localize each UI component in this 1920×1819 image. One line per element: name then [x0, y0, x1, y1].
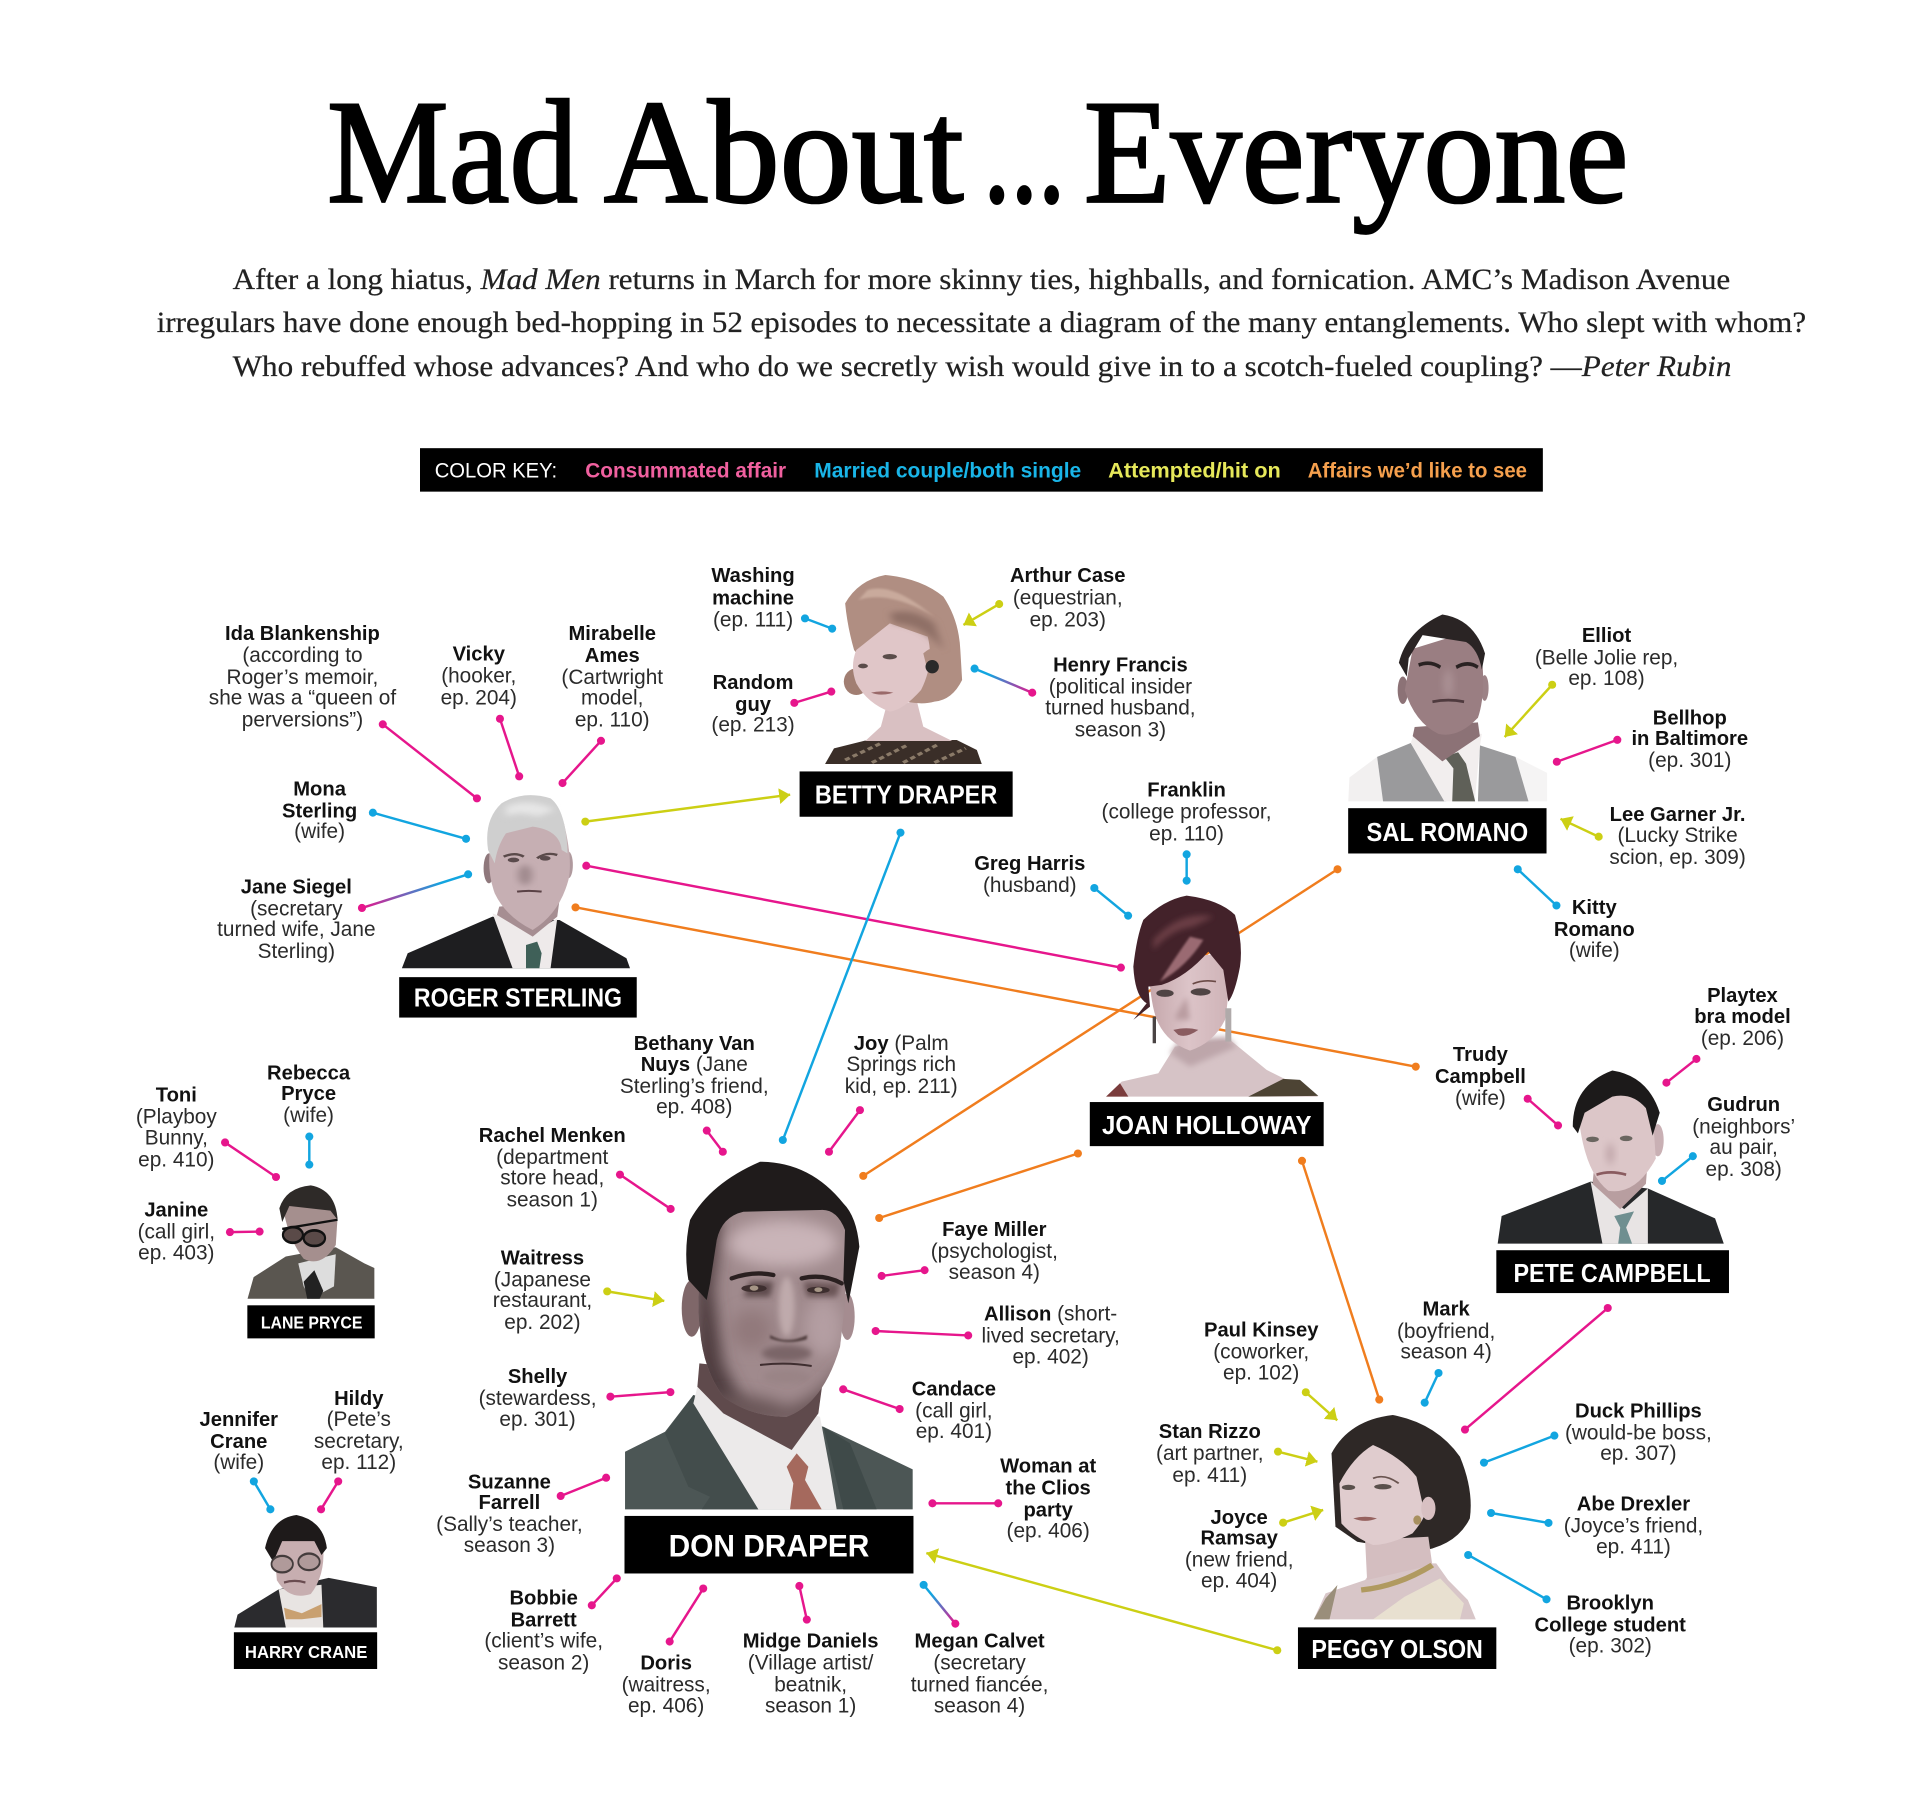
label: Rebecca Pryce: Rebecca	[267, 1062, 351, 1084]
color key legend: Married couple/both single	[814, 459, 1081, 483]
label: Doris: Doris	[640, 1653, 692, 1675]
name tag: Don Draper: DON DRAPER	[669, 1527, 869, 1563]
intro text: irregulars have done enough bed-hopping in 52 episodes to necessitate a diagram of the many entanglements. Who slept with whom?	[157, 306, 1806, 339]
connector: Shelly	[606, 1388, 674, 1401]
label: Jennifer Crane: Crane	[210, 1431, 267, 1453]
connector: Midge	[795, 1582, 811, 1624]
label: Janine: Janine	[144, 1200, 208, 1222]
color key legend: Consummated affair	[585, 459, 786, 483]
connector: Don to Sal	[859, 865, 1342, 1180]
label: Candace: ep. 401)	[916, 1420, 992, 1443]
label: Bobbie Barrett: Bobbie	[509, 1588, 578, 1610]
label: Elliot: Elliot	[1582, 625, 1631, 647]
label: Toni: Toni	[156, 1084, 197, 1106]
label: Stan Rizzo: (art partner,	[1156, 1442, 1264, 1465]
label: Janine: ep. 403)	[138, 1241, 214, 1264]
connector: Stan Rizzo	[1274, 1448, 1317, 1462]
label: Faye Miller: Faye Miller	[942, 1219, 1047, 1241]
connector: Paul Kinsey	[1302, 1388, 1337, 1420]
label: Janine: (call girl,	[138, 1221, 215, 1244]
label: Bobbie Barrett: (client’s wife,	[484, 1630, 603, 1653]
connector: Washing machine	[801, 614, 836, 633]
label: Woman at the Clios party: Woman at	[1000, 1455, 1096, 1477]
label: Hildy: ep. 112)	[321, 1451, 396, 1474]
label: Arthur Case: Arthur Case	[1010, 565, 1126, 587]
label: Jane Siegel: Jane Siegel	[241, 876, 352, 898]
label: Duck Phillips: (would-be boss,	[1565, 1421, 1712, 1444]
label: Paul Kinsey: (coworker,	[1213, 1341, 1309, 1364]
connector: Pete to Peggy	[1461, 1304, 1612, 1434]
label: Ida Blankenship: she was a “queen of	[209, 687, 396, 710]
label: Random guy: Random	[713, 672, 793, 694]
label: Waitress: restaurant,	[493, 1289, 592, 1312]
connector: Mark	[1421, 1369, 1443, 1407]
label: Lee Garner Jr.: (Lucky Strike	[1617, 824, 1738, 847]
connector: Megan	[920, 1581, 959, 1628]
connector: Greg Harris	[1090, 884, 1132, 920]
name tag: Roger Sterling: ROGER STERLING	[414, 983, 622, 1013]
label: Megan Calvet: turned fiancée,	[911, 1674, 1048, 1697]
label: Joyce Ramsay: ep. 404)	[1201, 1570, 1277, 1593]
label: Duck Phillips: Duck Phillips	[1575, 1400, 1702, 1422]
connector: Clios woman	[928, 1499, 1002, 1507]
label: Greg Harris: (husband)	[983, 874, 1077, 897]
label: Rebecca Pryce: (wife)	[283, 1104, 334, 1127]
connector: Joan to Don	[875, 1149, 1082, 1222]
label: Rachel Menken: store head,	[500, 1167, 604, 1190]
label: Mirabelle Ames: (Cartwright	[561, 666, 663, 689]
name tag: Joan Holloway: JOAN HOLLOWAY	[1102, 1110, 1312, 1140]
label: Paul Kinsey: Paul Kinsey	[1204, 1320, 1319, 1342]
connector: Suzanne	[557, 1474, 610, 1500]
label: Jane Siegel: turned wife, Jane	[217, 918, 376, 941]
label: Joyce Ramsay: Ramsay	[1200, 1528, 1279, 1550]
label: Stan Rizzo: Stan Rizzo	[1159, 1421, 1261, 1443]
label: Midge Daniels: season 1)	[765, 1694, 856, 1717]
label: Suzanne Farrell: (Sally’s teacher,	[436, 1513, 583, 1536]
label: Jane Siegel: (secretary	[250, 897, 343, 920]
connector: Jennifer	[250, 1477, 274, 1513]
label: Rachel Menken: season 1)	[507, 1189, 598, 1212]
label: Mona Sterling: (wife)	[294, 820, 345, 843]
intro text	[157, 263, 1806, 383]
label: Megan Calvet: Megan Calvet	[915, 1631, 1045, 1653]
connector: Betty to Don	[779, 829, 905, 1144]
label: Ida Blankenship: perversions”)	[242, 709, 363, 732]
label: Elliot: ep. 108)	[1568, 667, 1645, 690]
label: Toni: ep. 410)	[138, 1148, 214, 1171]
connector: Henry Francis	[971, 665, 1036, 697]
connector: Doris	[666, 1584, 707, 1646]
title: ...	[983, 71, 1065, 235]
label: Random guy: guy	[735, 694, 772, 716]
label: Bellhop: (ep. 301)	[1648, 749, 1731, 772]
connector: Jane	[358, 870, 472, 912]
name tag: Don Draper	[624, 1516, 913, 1573]
label: Doris: (waitress,	[622, 1674, 711, 1697]
label: Mark: (boyfriend,	[1397, 1320, 1495, 1343]
connector: Joy	[825, 1106, 864, 1156]
label: Candace: Candace	[912, 1378, 996, 1400]
portrait: Peggy Olson	[1314, 1415, 1476, 1619]
label: Shelly: (stewardess,	[479, 1387, 596, 1410]
label: Random guy: (ep. 213)	[711, 714, 795, 737]
label: Joyce Ramsay: Joyce	[1211, 1507, 1268, 1529]
connector: Hildy	[317, 1477, 342, 1513]
connector: Lee Garner Jr.	[1560, 819, 1603, 841]
label: Ida Blankenship: Ida Blankenship	[225, 623, 380, 645]
connector: Mona	[369, 809, 470, 843]
connector: Vicky	[496, 715, 523, 780]
label: Joy: Joy (Palm	[854, 1032, 949, 1055]
label: Vicky: Vicky	[453, 644, 506, 666]
connector: Waitress	[603, 1287, 664, 1301]
label: Henry Francis: season 3)	[1075, 719, 1166, 742]
label: Mirabelle Ames: Ames	[585, 645, 640, 667]
label: Midge Daniels: Midge Daniels	[743, 1631, 878, 1653]
name tag: Harry Crane	[234, 1632, 377, 1669]
connector: Candace	[839, 1385, 904, 1413]
label: Bobbie Barrett: season 2)	[498, 1652, 589, 1675]
label: Greg Harris: Greg Harris	[974, 853, 1085, 875]
label: Allison: ep. 402)	[1012, 1345, 1089, 1368]
connector: Joan to Peggy	[1298, 1157, 1383, 1404]
label: Playtex bra model: bra model	[1694, 1006, 1791, 1028]
connector: Franklin	[1183, 850, 1191, 885]
label: Candace: (call girl,	[915, 1399, 993, 1422]
label: Paul Kinsey: ep. 102)	[1223, 1361, 1299, 1384]
label: Kitty Romano: Romano	[1554, 919, 1635, 941]
portrait: Betty Draper	[825, 575, 982, 764]
label: Joyce Ramsay: (new friend,	[1185, 1549, 1294, 1572]
label: Hildy: (Pete’s	[327, 1408, 391, 1431]
name tag: Pete Campbell: PETE CAMPBELL	[1513, 1258, 1711, 1288]
portrait: Pete Campbell	[1498, 1070, 1724, 1244]
label: Playtex bra model: Playtex	[1707, 985, 1779, 1007]
label: Lee Garner Jr.: Lee Garner Jr.	[1610, 804, 1745, 826]
label: Washing machine: (ep. 111)	[713, 608, 793, 631]
label: Rebecca Pryce: Pryce	[281, 1083, 336, 1105]
color key legend: COLOR KEY:	[435, 459, 557, 483]
name tag: Betty Draper: BETTY DRAPER	[815, 779, 997, 809]
name tag: Peggy Olson	[1298, 1627, 1496, 1669]
label: Bethany Van Nuys: Sterling’s friend,	[620, 1075, 769, 1098]
label: Jennifer Crane: (wife)	[213, 1451, 264, 1474]
label: Washing machine: machine	[712, 587, 794, 609]
label: Joy: Springs rich	[846, 1053, 956, 1076]
label: Arthur Case: (equestrian,	[1013, 586, 1123, 609]
name tag: Lane Pryce	[247, 1305, 375, 1338]
label: Waitress: ep. 202)	[504, 1311, 581, 1334]
label: Woman at the Clios party: the Clios	[1006, 1478, 1091, 1500]
label: Rachel Menken: Rachel Menken	[479, 1125, 626, 1147]
portrait: Sal Romano	[1348, 614, 1547, 801]
label: Woman at the Clios party: (ep. 406)	[1007, 1519, 1090, 1542]
label: Shelly: Shelly	[508, 1366, 568, 1388]
label: Allison: Allison (short-	[984, 1303, 1117, 1326]
label: Playtex bra model: (ep. 206)	[1701, 1027, 1784, 1050]
portrait: Lane Pryce	[248, 1185, 374, 1299]
connector: Bobbie	[588, 1574, 621, 1609]
name tag: Betty Draper	[800, 771, 1013, 817]
name tag: Peggy Olson: PEGGY OLSON	[1311, 1634, 1483, 1664]
label: Mirabelle Ames: model,	[581, 687, 643, 710]
color key legend: Attempted/hit on	[1108, 459, 1281, 483]
label: Suzanne Farrell: Suzanne	[468, 1471, 551, 1493]
label: Gudrun: Gudrun	[1707, 1094, 1780, 1116]
label: Bellhop: Bellhop	[1653, 707, 1727, 729]
label: Arthur Case: ep. 203)	[1030, 608, 1106, 631]
label: Bethany Van Nuys: ep. 408)	[656, 1096, 732, 1119]
name tag: Lane Pryce: LANE PRYCE	[261, 1313, 363, 1333]
name tag: Roger Sterling	[399, 977, 637, 1018]
label: Faye Miller: (psychologist,	[931, 1240, 1058, 1263]
label: Toni: Bunny,	[145, 1126, 208, 1149]
label: Brooklyn College student: College student	[1534, 1615, 1686, 1637]
name tag: Pete Campbell	[1496, 1250, 1729, 1293]
label: Megan Calvet: season 4)	[934, 1694, 1025, 1717]
label: Henry Francis: Henry Francis	[1053, 655, 1188, 677]
label: Mirabelle Ames: ep. 110)	[575, 709, 650, 732]
connector: Roger to Joan	[582, 862, 1125, 972]
label: Abe Drexler: ep. 411)	[1596, 1535, 1671, 1558]
label: Mona Sterling: Mona	[293, 778, 347, 800]
label: Henry Francis: (political insider	[1049, 676, 1192, 699]
name tag: Sal Romano	[1348, 808, 1547, 853]
intro text: After a long hiatus, Mad Men returns in March for more skinny ties, highballs, and fornication. AMC’s Madison Avenue	[233, 263, 1730, 296]
label: Elliot: (Belle Jolie rep,	[1535, 646, 1678, 669]
title: Mad	[327, 71, 578, 235]
label: Waitress: Waitress	[501, 1247, 584, 1269]
label: Brooklyn College student: Brooklyn	[1566, 1593, 1654, 1615]
color key legend	[420, 448, 1543, 492]
label: Bethany Van Nuys: Bethany Van	[634, 1033, 755, 1055]
intro text: Who rebuffed whose advances? And who do we secretly wish would give in to a scotch-fueled coupling? — Peter Rubin	[233, 350, 1731, 383]
connector: Roger to Trudy	[571, 903, 1420, 1071]
label: Vicky: (hooker,	[441, 665, 516, 688]
connector: Toni	[221, 1138, 280, 1181]
connector: Peggy to Don	[926, 1553, 1281, 1654]
label: Rachel Menken: (department	[496, 1146, 609, 1169]
label: Jennifer Crane: Jennifer	[200, 1409, 278, 1431]
label: Mona Sterling: Sterling	[282, 800, 357, 822]
label: Trudy Campbell: Trudy	[1453, 1044, 1509, 1066]
label: Lee Garner Jr.: scion, ep. 309)	[1609, 846, 1746, 869]
connector: Joyce Ramsay	[1279, 1510, 1323, 1527]
connector: Playtex model	[1662, 1055, 1700, 1087]
connector: Bethany	[703, 1127, 727, 1156]
label: Trudy Campbell: Campbell	[1435, 1066, 1526, 1088]
label: Ida Blankenship: (according to	[242, 644, 363, 667]
label: Midge Daniels: beatnik,	[774, 1674, 847, 1697]
label: Vicky: ep. 204)	[441, 687, 517, 710]
connector: Janine	[226, 1228, 264, 1236]
title: Everyone	[1084, 71, 1629, 235]
title: About	[604, 71, 964, 235]
connector: Arthur Case	[963, 600, 1003, 625]
label: Shelly: ep. 301)	[499, 1408, 576, 1431]
label: Abe Drexler: (Joyce’s friend,	[1564, 1514, 1703, 1537]
connector: Ida	[379, 720, 481, 802]
label: Midge Daniels: (Village artist/	[748, 1652, 874, 1675]
label: Henry Francis: turned husband,	[1045, 696, 1196, 719]
label: Duck Phillips: ep. 307)	[1600, 1442, 1677, 1465]
label: Trudy Campbell: (wife)	[1455, 1087, 1506, 1110]
connector: Random guy	[790, 688, 835, 707]
connector: Abe Drexler	[1487, 1509, 1553, 1527]
name tag: Harry Crane: HARRY CRANE	[245, 1642, 367, 1662]
name tag: Sal Romano: SAL ROMANO	[1367, 817, 1528, 847]
connector: Allison	[872, 1327, 972, 1339]
connector: Gudrun	[1658, 1152, 1697, 1185]
label: Gudrun: (neighbors’	[1692, 1115, 1795, 1138]
connector: Brooklyn student	[1464, 1551, 1551, 1603]
label: Faye Miller: season 4)	[949, 1261, 1040, 1284]
portrait: Harry Crane	[234, 1515, 377, 1628]
color key legend: Affairs we’d like to see	[1308, 459, 1527, 483]
label: Franklin: (college professor,	[1102, 801, 1271, 824]
portrait: Roger Sterling	[402, 795, 630, 968]
connector: Mirabelle	[558, 737, 605, 787]
connector: Kitty Romano	[1514, 865, 1560, 910]
label: Kitty Romano: (wife)	[1569, 939, 1620, 962]
connector: Rebecca	[305, 1133, 313, 1169]
label: Stan Rizzo: ep. 411)	[1172, 1464, 1247, 1487]
label: Franklin: ep. 110)	[1149, 823, 1224, 846]
connector: Duck Phillips	[1480, 1432, 1558, 1467]
label: Jane Siegel: Sterling)	[258, 940, 335, 963]
label: Ida Blankenship: Roger’s memoir,	[227, 666, 378, 689]
connector: Rachel	[616, 1171, 675, 1213]
label: Woman at the Clios party: party	[1023, 1500, 1074, 1522]
label: Gudrun: ep. 308)	[1706, 1158, 1782, 1181]
label: Bellhop: in Baltimore	[1631, 728, 1748, 750]
label: Waitress: (Japanese	[494, 1268, 591, 1291]
label: Mark: Mark	[1423, 1299, 1470, 1321]
label: Megan Calvet: (secretary	[933, 1652, 1026, 1675]
label: Hildy: Hildy	[334, 1388, 384, 1410]
label: Doris: ep. 406)	[628, 1694, 704, 1717]
label: Kitty Romano: Kitty	[1572, 897, 1617, 919]
name tag: Joan Holloway	[1090, 1102, 1324, 1146]
label: Mirabelle Ames: Mirabelle	[568, 623, 656, 645]
connector: Roger to Betty	[581, 795, 790, 826]
label: Joy: kid, ep. 211)	[845, 1075, 958, 1098]
connector: Trudy	[1524, 1095, 1562, 1129]
label: Bethany Van Nuys: Nuys (Jane	[641, 1053, 748, 1076]
label: Hildy: secretary,	[314, 1430, 404, 1453]
label: Brooklyn College student: (ep. 302)	[1569, 1634, 1652, 1657]
label: Franklin: Franklin	[1147, 780, 1226, 802]
label: Allison: lived secretary,	[981, 1325, 1120, 1348]
portrait: Joan Holloway	[1106, 896, 1318, 1097]
label: Bobbie Barrett: Barrett	[511, 1610, 577, 1632]
label: Suzanne Farrell: season 3)	[464, 1534, 555, 1557]
label: Gudrun: au pair,	[1710, 1136, 1778, 1159]
connector: Elliot	[1505, 681, 1556, 737]
portrait: Don Draper	[625, 1162, 913, 1509]
connector: Bellhop	[1553, 736, 1621, 766]
connector: Faye	[878, 1266, 929, 1280]
label: Washing machine: Washing	[711, 565, 795, 587]
title	[327, 71, 1629, 235]
label: Toni: (Playboy	[136, 1105, 217, 1128]
label: Abe Drexler: Abe Drexler	[1577, 1493, 1690, 1515]
label: Mark: season 4)	[1400, 1341, 1492, 1364]
label: Suzanne Farrell: Farrell	[479, 1492, 540, 1514]
